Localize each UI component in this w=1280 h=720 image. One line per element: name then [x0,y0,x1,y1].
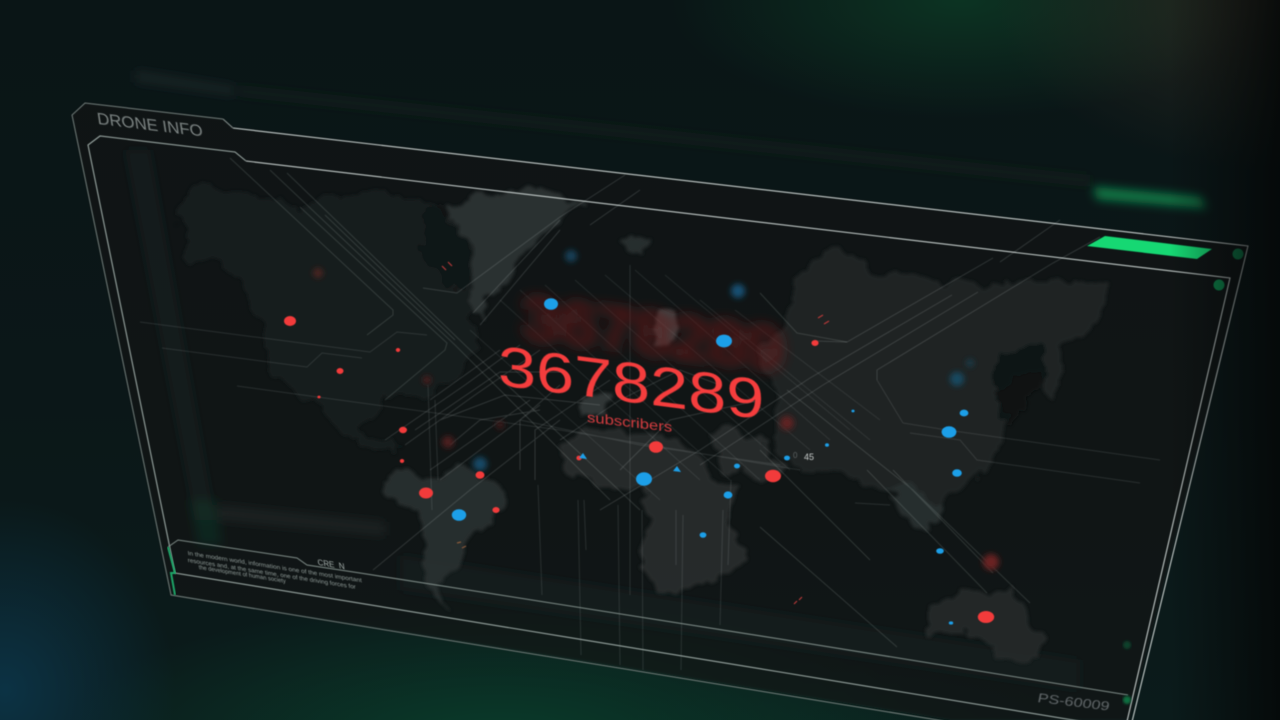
green status bar glow [1093,187,1207,208]
inner frame [246,161,1230,720]
marker value label: 45 [804,452,814,462]
map: Scandinavia [657,308,680,345]
edge vignette [1170,0,1280,720]
inner frame left and bottom [88,136,1085,720]
map: Europe [583,390,612,420]
map: Hudson Bay [420,205,475,290]
map: Greenland [448,190,582,322]
footer description text: the development of human society [198,565,287,585]
map: South America [380,465,506,611]
marker value label: 0 [793,451,798,460]
outer frame left and bottom [72,103,950,720]
map: Iceland [621,233,652,255]
map: Australia [930,590,1045,662]
footer panel outline [168,540,1128,695]
subscribers label: subscribers [587,410,672,436]
map: Southeast Asia [885,480,940,530]
main number: 3678289 [498,335,764,432]
circuit: NW-SE bundle [230,158,1030,647]
outer frame [233,128,1248,720]
serial code: PS-60009 [1036,691,1111,714]
blue data markers [452,298,968,625]
footer label CRE N: CRE N [317,558,346,571]
footer description text: resources and, at the same time, one of the driving forces for [187,558,356,591]
blurred distant markers [313,250,999,570]
circuit: horizontal traces [140,322,1160,505]
world map [175,185,1108,662]
marker value label [793,451,814,462]
green footer accent [168,547,175,595]
circuit: center traces [373,345,760,570]
background ghost reflections [125,70,1090,690]
ghost number reflection: 3678289 [522,284,784,384]
green status bar [1087,236,1212,259]
panel backing [72,103,1248,720]
green indicator dots [1214,248,1244,290]
outer frame notch [223,119,233,128]
dim green indicators [1123,641,1131,704]
map: Asia [760,250,1108,520]
circuit: SW-NE bundle [423,175,1100,510]
circuit lines [140,158,1160,670]
circuit: vertical traces [428,265,731,670]
map: Sea of Japan [995,345,1050,430]
heading: DRONE INFO: DRONE INFO [96,110,204,140]
footer description text: In the modern world, information is one of the most important [187,551,363,584]
map: Middle East [707,425,790,480]
red data markers [284,316,994,623]
map: Africa [557,430,745,590]
map: North America [175,185,480,452]
circuit: central diagonal hatch [470,270,880,500]
red tick marks [442,262,829,604]
